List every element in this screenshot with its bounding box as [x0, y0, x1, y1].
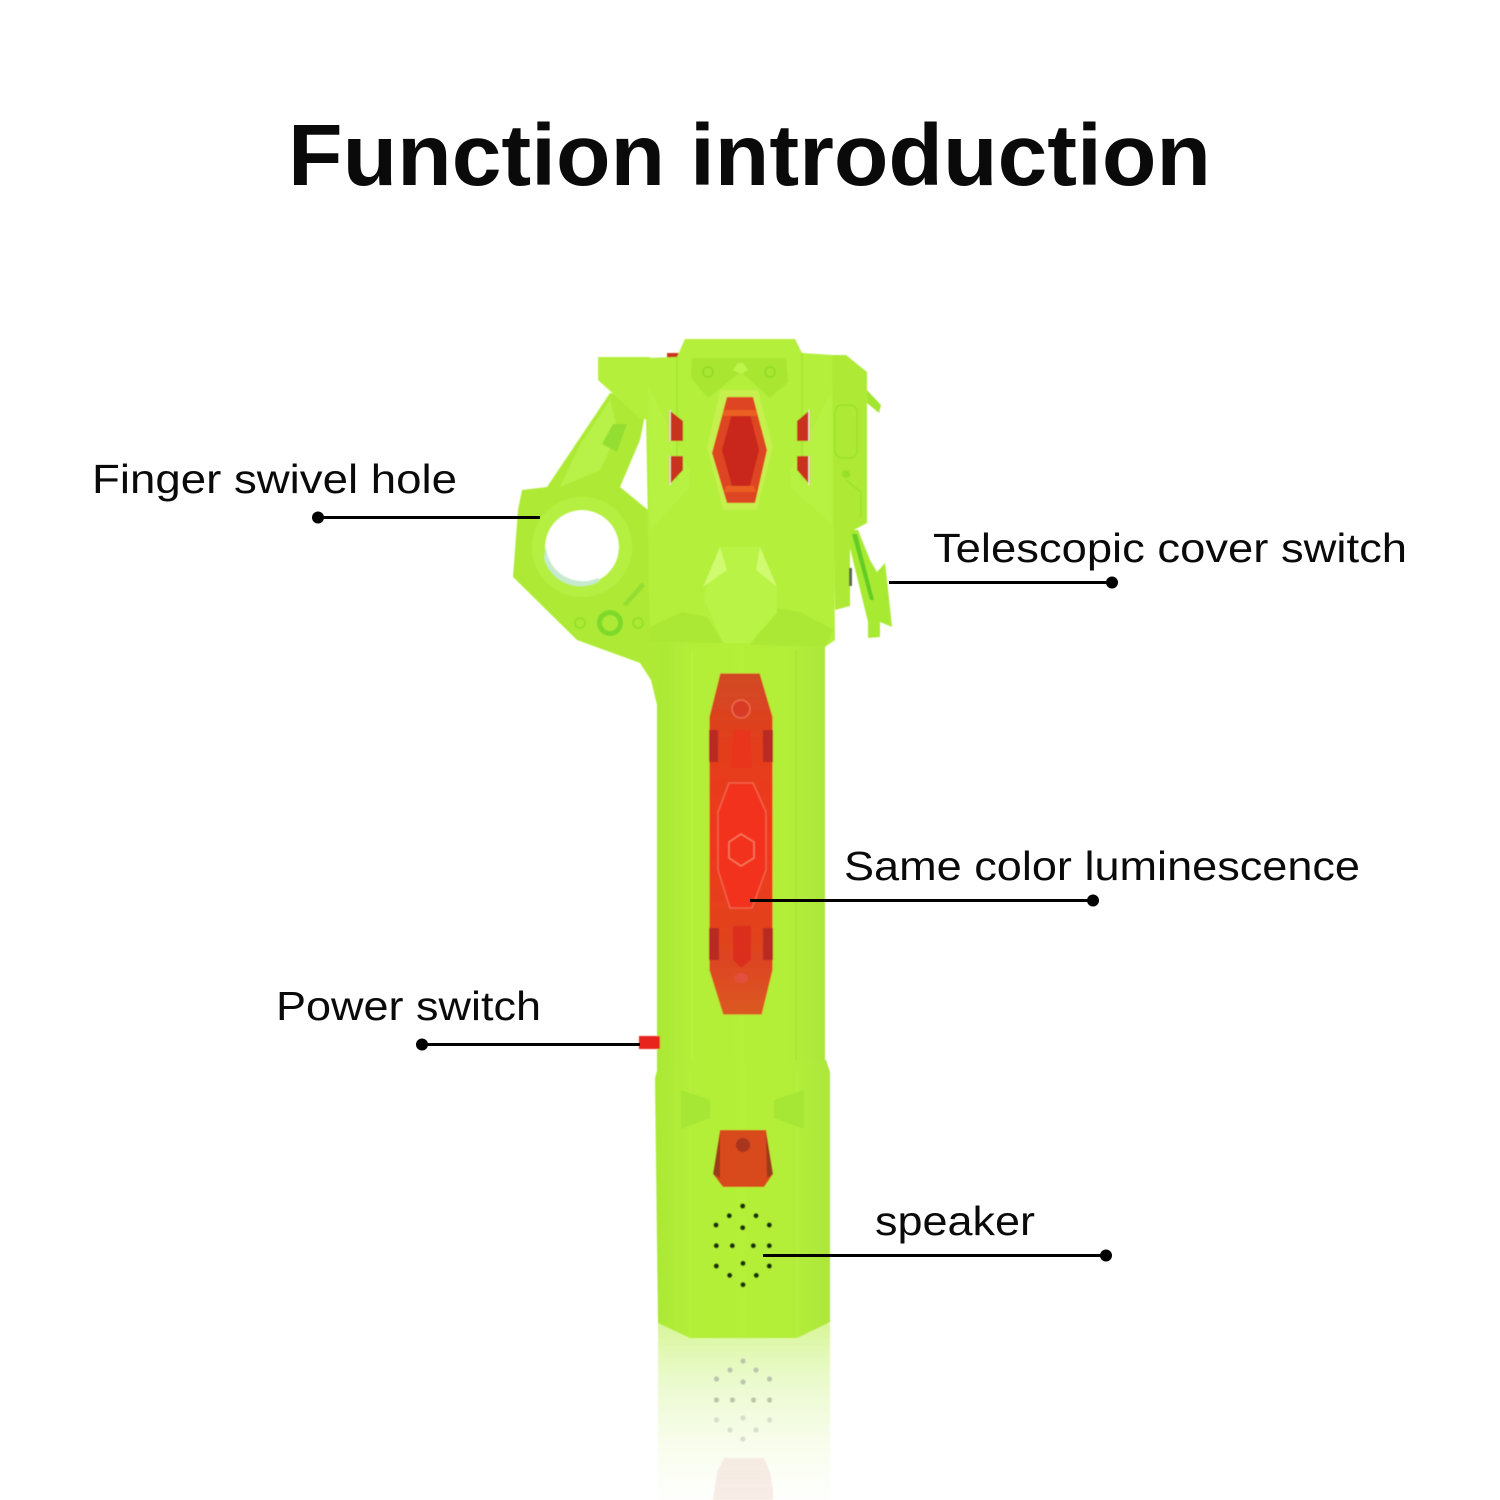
leader line: speaker	[763, 1254, 1106, 1257]
leader dot	[1106, 576, 1118, 588]
label: telescopic cover switch	[889, 525, 1407, 588]
handle shaft	[657, 640, 825, 1070]
head front plate	[645, 339, 835, 647]
chest emblem	[703, 547, 777, 643]
small red tab at top	[667, 353, 679, 358]
red luminous window	[709, 673, 773, 1015]
leader dot	[312, 512, 324, 524]
label: power switch	[276, 983, 640, 1050]
label: speaker	[763, 1198, 1112, 1262]
leader line: telescopic cover switch	[889, 581, 1112, 584]
leader line: power switch	[422, 1043, 640, 1046]
red gem on grip	[713, 1130, 773, 1187]
top-left block	[598, 357, 650, 420]
leader dot	[1087, 894, 1099, 906]
title: Function introduction	[288, 107, 1211, 204]
leader dot	[1100, 1250, 1112, 1262]
label: same color luminescence	[750, 843, 1360, 906]
label: same color luminescence: Same color luminescence	[844, 843, 1360, 889]
label: speaker: speaker	[875, 1198, 1035, 1244]
finger ring arm	[513, 393, 660, 705]
label: telescopic cover switch: Telescopic cover switch	[933, 525, 1407, 571]
lower grip section	[655, 1060, 830, 1338]
label: power switch: Power switch	[276, 983, 541, 1029]
telescopic cover switch	[849, 530, 892, 638]
product: green toy handle	[513, 339, 892, 1500]
red power switch	[639, 1036, 660, 1049]
upper side vents	[669, 410, 683, 485]
label: finger swivel hole: Finger swivel hole	[92, 456, 457, 502]
speaker holes	[713, 1203, 772, 1287]
leader dot	[416, 1038, 428, 1050]
side cover with clip	[830, 355, 881, 610]
leader line: same color luminescence	[750, 899, 1093, 902]
leader line: finger swivel hole	[318, 516, 540, 519]
upper red gem	[707, 390, 773, 510]
reflection below handle	[658, 1323, 830, 1500]
label: finger swivel hole	[92, 456, 540, 524]
